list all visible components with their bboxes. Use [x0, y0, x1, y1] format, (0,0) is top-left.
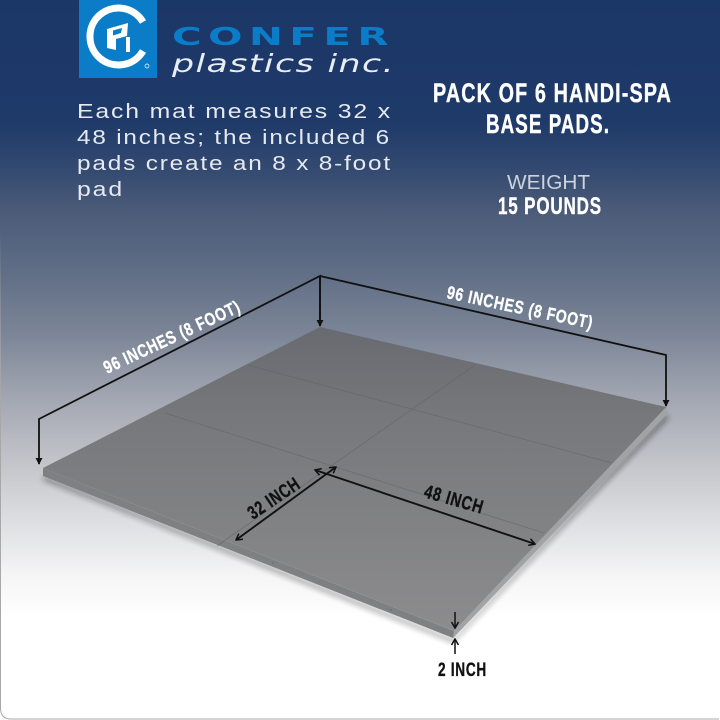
description text	[77, 101, 392, 201]
logo: Confer Plastics	[79, 0, 395, 78]
dimension: 2 inch thickness: 2 INCH	[438, 660, 487, 681]
dimension: 32 inch	[236, 467, 336, 540]
mat edge	[43, 407, 667, 638]
dimension: 48 inch: 48 INCH	[422, 482, 486, 519]
edge pins	[272, 562, 392, 611]
dimension: 2 inch thickness	[438, 612, 487, 681]
mat shadow	[43, 415, 668, 642]
base pad mat	[43, 327, 668, 642]
weight value: 15 POUNDS	[498, 193, 602, 220]
heading: pack of 6	[433, 78, 672, 139]
dimension: 48 inch	[315, 470, 535, 544]
logo icon: CPI mark	[79, 0, 157, 78]
dimension: left 96 inches	[39, 276, 320, 464]
logo wordmark: plastics inc.: plastics inc.	[171, 49, 395, 78]
description text: Each mat measures 32 x	[77, 101, 392, 123]
logo wordmark: CONFER: CONFER	[172, 22, 395, 51]
dimension: left 96 inches: 96 INCHES (8 FOOT)	[100, 297, 244, 378]
dimension: right 96 inches	[320, 276, 666, 406]
description text: pad	[77, 179, 124, 201]
dimension: right 96 inches: 96 INCHES (8 FOOT)	[445, 282, 595, 333]
heading: pack of 6: BASE PADS.	[486, 109, 610, 139]
description text: pads create an 8 x 8-foot	[77, 153, 392, 175]
seams	[165, 365, 612, 546]
description text: 48 inches; the included 6	[77, 127, 391, 149]
dimension: 32 inch: 32 INCH	[244, 474, 305, 524]
mat top	[43, 327, 666, 631]
weight label: WEIGHT	[507, 172, 590, 194]
